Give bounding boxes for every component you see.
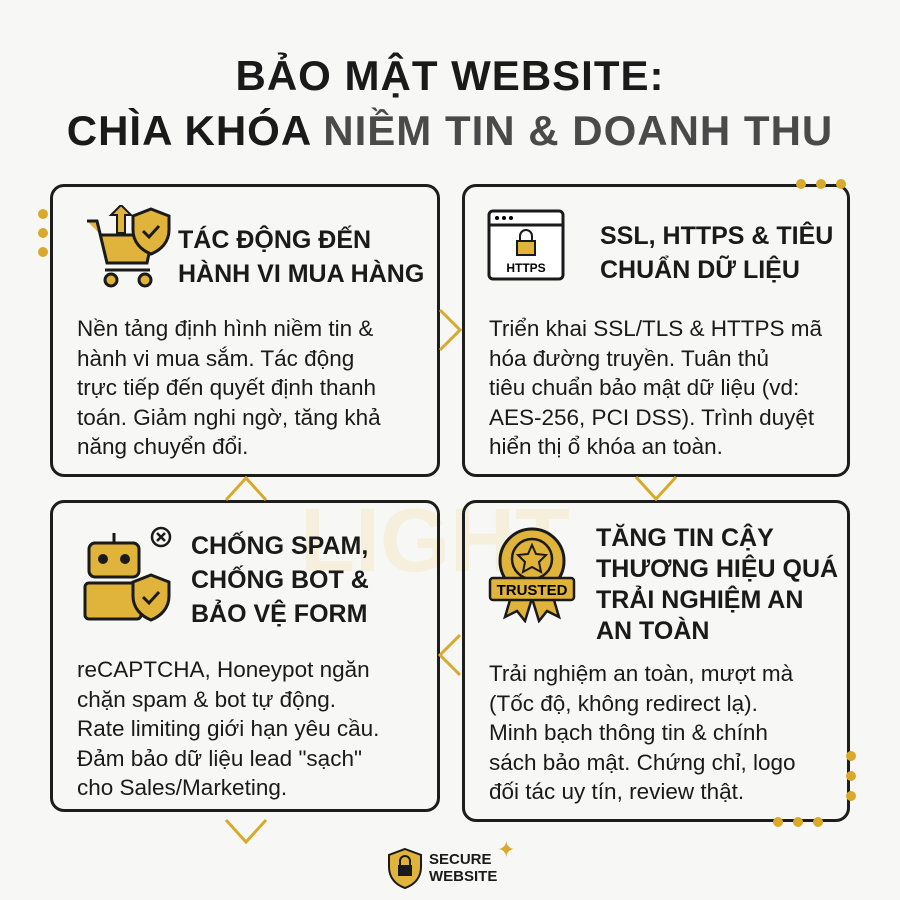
heading: CHỐNG SPAM,: [191, 532, 368, 560]
heading: HÀNH VI MUA HÀNG: [178, 260, 424, 288]
body text: Nền tảng định hình niềm tin &: [77, 316, 373, 341]
body text: (Tốc độ, không redirect lạ).: [489, 690, 758, 716]
heading: BẢO VỆ FORM: [191, 600, 367, 628]
body text: [489, 316, 822, 459]
icon: https browser: [488, 210, 564, 280]
heading: SSL, HTTPS & TIÊU: [600, 222, 833, 250]
title: BẢO MẬT WEBSITE:: [236, 52, 664, 99]
icon: robot shield: [84, 526, 172, 622]
title: CHÌA KHÓA NIỀM TIN & DOANH THU: [67, 107, 833, 154]
body text: AES-256, PCI DSS). Trình duyệt: [489, 404, 814, 430]
heading: TĂNG TIN CẬY: [596, 524, 774, 552]
heading: AN TOÀN: [596, 617, 709, 645]
body text: Trải nghiệm an toàn, mượt mà: [489, 661, 793, 686]
title: [67, 52, 833, 154]
icon: https browser: HTTPS: [506, 261, 546, 275]
footer logo: secure website: SECURE: [429, 851, 492, 868]
body text: sách bảo mật. Chứng chỉ, logo: [489, 750, 796, 774]
body text: [77, 316, 381, 459]
heading: TÁC ĐỘNG ĐẾN: [178, 226, 371, 254]
icon: trusted badge: [488, 528, 576, 623]
heading: THƯƠNG HIỆU QUÁ: [596, 555, 838, 583]
body text: Triển khai SSL/TLS & HTTPS mã: [489, 316, 822, 341]
body text: [489, 661, 796, 804]
footer logo: secure website: ✦: [497, 837, 515, 862]
body text: Đảm bảo dữ liệu lead "sạch": [77, 746, 362, 770]
body text: trực tiếp đến quyết định thanh: [77, 375, 376, 400]
body text: năng chuyển đổi.: [77, 434, 248, 459]
icon: cart shield: [87, 205, 170, 288]
panel: tang tin cay: [462, 500, 850, 822]
heading: CHỐNG BOT &: [191, 566, 369, 594]
watermark: LIGHT: [300, 491, 570, 591]
body text: chặn spam & bot tự động.: [77, 686, 336, 712]
footer logo: secure website: [388, 837, 515, 889]
footer logo: secure website: WEBSITE: [429, 868, 497, 885]
panel: ssl https: [462, 184, 850, 477]
panel: chong spam: [50, 500, 440, 812]
body text: cho Sales/Marketing.: [77, 775, 287, 800]
heading: TRẢI NGHIỆM AN: [596, 586, 803, 614]
body text: Minh bạch thông tin & chính: [489, 720, 768, 745]
body text: Rate limiting giới hạn yêu cầu.: [77, 716, 379, 741]
body text: hiển thị ổ khóa an toàn.: [489, 434, 723, 459]
heading: [596, 524, 838, 645]
decorative dots: [38, 179, 856, 827]
body text: tiêu chuẩn bảo mật dữ liệu (vd:: [489, 375, 799, 400]
heading: [178, 225, 424, 288]
body text: hành vi mua sắm. Tác động: [77, 346, 354, 370]
panel: hanh vi mua hang: [50, 184, 440, 477]
icon: trusted badge: TRUSTED: [497, 582, 568, 599]
body text: reCAPTCHA, Honeypot ngăn: [77, 657, 370, 682]
heading: [600, 222, 833, 284]
body text: toán. Giảm nghi ngờ, tăng khả: [77, 404, 381, 430]
body text: [77, 657, 379, 800]
body text: hóa đường truyền. Tuân thủ: [489, 346, 769, 370]
heading: [191, 531, 369, 628]
body text: đối tác uy tín, review thật.: [489, 779, 744, 804]
heading: CHUẨN DỮ LIỆU: [600, 256, 800, 284]
